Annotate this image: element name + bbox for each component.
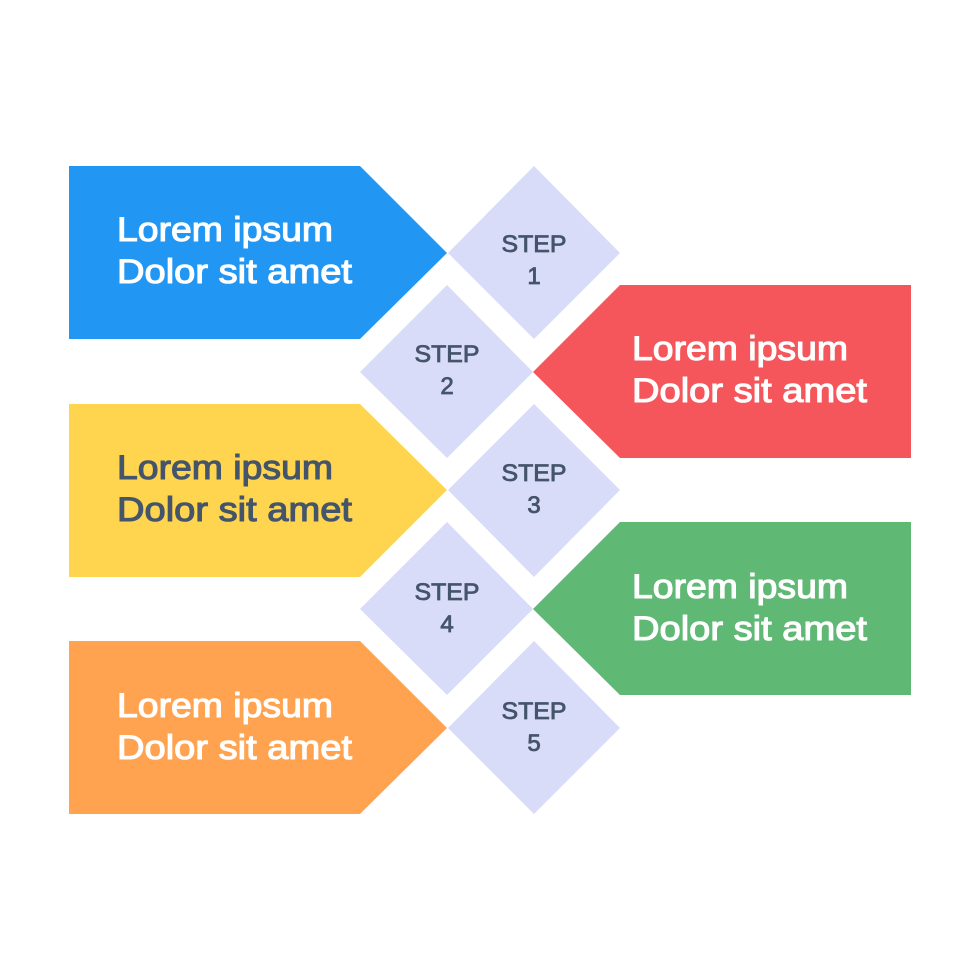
- diamond: step 4: [360, 522, 533, 695]
- panel: orange arrow step 5: [69, 641, 447, 814]
- diamond: step 1: STEP: [502, 231, 566, 258]
- diamond: step 4: STEP: [414, 579, 480, 606]
- diamond: step 3: STEP: [502, 460, 566, 487]
- panel: red arrow step 2: Lorem ipsum: [632, 330, 848, 368]
- panel: yellow arrow step 3: Lorem ipsum: [117, 449, 333, 487]
- diamond: step 5: STEP: [502, 698, 566, 725]
- panel: green arrow step 4: [533, 522, 911, 695]
- panel: blue arrow step 1: Lorem ipsum: [117, 211, 333, 249]
- panel: blue arrow step 1: [69, 166, 447, 339]
- panel: yellow arrow step 3: [69, 404, 447, 577]
- diamond: step 1: 1: [527, 263, 541, 290]
- diamond: step 2: STEP: [414, 341, 480, 368]
- diamond: step 5: 5: [527, 730, 541, 757]
- diamond: step 1: [448, 166, 620, 339]
- panel: red arrow step 2: Dolor sit amet: [632, 372, 868, 410]
- panel: orange arrow step 5: Dolor sit amet: [117, 729, 353, 767]
- panel: green arrow step 4: Dolor sit amet: [632, 610, 868, 648]
- diamond: step 3: [448, 404, 620, 577]
- panel: yellow arrow step 3: Dolor sit amet: [117, 491, 353, 529]
- panel: green arrow step 4: Lorem ipsum: [632, 568, 848, 606]
- panel: orange arrow step 5: Lorem ipsum: [117, 687, 333, 725]
- panel: blue arrow step 1: Dolor sit amet: [117, 253, 353, 291]
- diamond: step 2: [360, 285, 533, 458]
- panel: red arrow step 2: [533, 285, 911, 458]
- diamond: step 4: 4: [440, 611, 454, 638]
- diamond: step 2: 2: [440, 373, 454, 400]
- diamond: step 3: 3: [527, 492, 541, 519]
- diamond: step 5: [448, 641, 620, 814]
